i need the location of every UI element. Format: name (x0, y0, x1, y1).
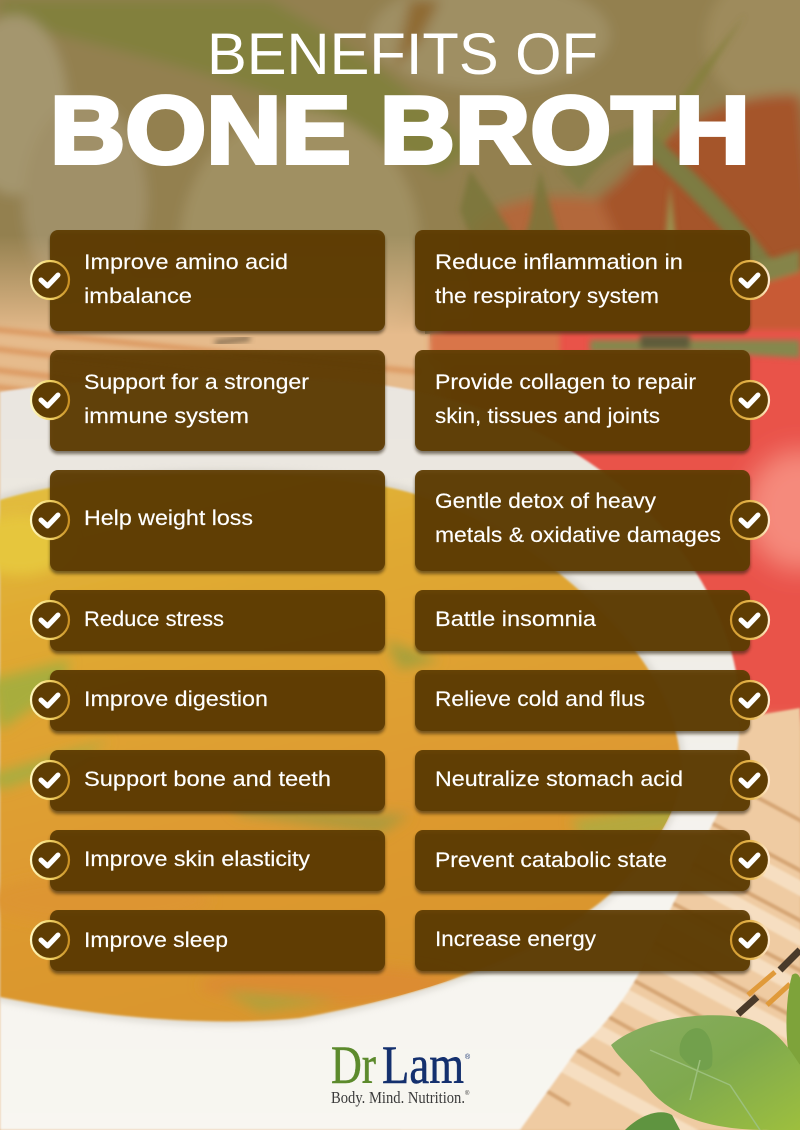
red tomato (440, 318, 800, 718)
card: digestion: Improve digestion (84, 688, 268, 711)
card: immune system: immune system (84, 405, 249, 428)
card: detox (415, 470, 769, 574)
card: collagen: skin, tissues and joints (435, 405, 660, 428)
card: sleep: Improve sleep (84, 929, 228, 952)
logo: Dr Lam: Body. Mind. Nutrition. (331, 1088, 465, 1107)
panel: left benefits column (31, 230, 385, 974)
card: skin elasticity: Improve skin elasticity (84, 848, 311, 871)
card: inflammation (415, 230, 769, 334)
card: cold and flus (415, 670, 769, 734)
card: inflammation: Reduce inflammation in (435, 251, 683, 274)
card: stomach acid (415, 750, 769, 814)
mat bottom right (400, 708, 800, 1130)
logo: Dr Lam: Lam (382, 1035, 464, 1095)
card: amino acid: Improve amino acid (84, 251, 288, 274)
card: weight loss: Help weight loss (84, 507, 253, 530)
tinted top of the photo (0, 0, 800, 380)
card: detox: Gentle detox of heavy (435, 490, 657, 513)
card: stress (31, 590, 385, 654)
logo: Dr Lam (331, 1035, 471, 1107)
card: bone and teeth: Support bone and teeth (84, 768, 331, 791)
card: immune system (31, 350, 385, 454)
card: energy (415, 910, 769, 974)
bowl (0, 377, 740, 1130)
card: digestion (31, 670, 385, 734)
basil leaf (611, 973, 800, 1130)
card: skin elasticity (31, 830, 385, 894)
card: insomnia: Battle insomnia (435, 608, 596, 631)
card: catabolic state: Prevent catabolic state (435, 849, 667, 872)
card: inflammation: the respiratory system (435, 285, 659, 308)
card: energy: Increase energy (435, 928, 597, 951)
card: catabolic state (415, 830, 769, 894)
panel: right benefits column (415, 230, 769, 974)
card: insomnia (415, 590, 769, 654)
card: cold and flus: Relieve cold and flus (435, 688, 645, 711)
card: immune system: Support for a stronger (84, 371, 309, 394)
card: collagen: Provide collagen to repair (435, 371, 696, 394)
card: amino acid: imbalance (84, 285, 192, 308)
card: bone and teeth (31, 750, 385, 814)
logo: Dr Lam: ® (465, 1090, 470, 1097)
card: amino acid (31, 230, 385, 334)
card: sleep (31, 910, 385, 974)
title line: Bone Broth: BONE BROTH (50, 77, 750, 184)
title line: Benefits of: BENEFITS OF (207, 22, 598, 87)
card: stress: Reduce stress (84, 608, 224, 631)
card: collagen (415, 350, 769, 454)
logo: Dr Lam: Dr (331, 1035, 376, 1095)
mat stripes top left (0, 328, 430, 400)
card: detox: metals & oxidative damages (435, 524, 721, 547)
title (50, 22, 750, 184)
card: weight loss (31, 470, 385, 574)
fade into mat (0, 235, 425, 335)
logo: Dr Lam: ® (465, 1053, 471, 1061)
soup (0, 473, 680, 1021)
card: stomach acid: Neutralize stomach acid (435, 768, 683, 791)
